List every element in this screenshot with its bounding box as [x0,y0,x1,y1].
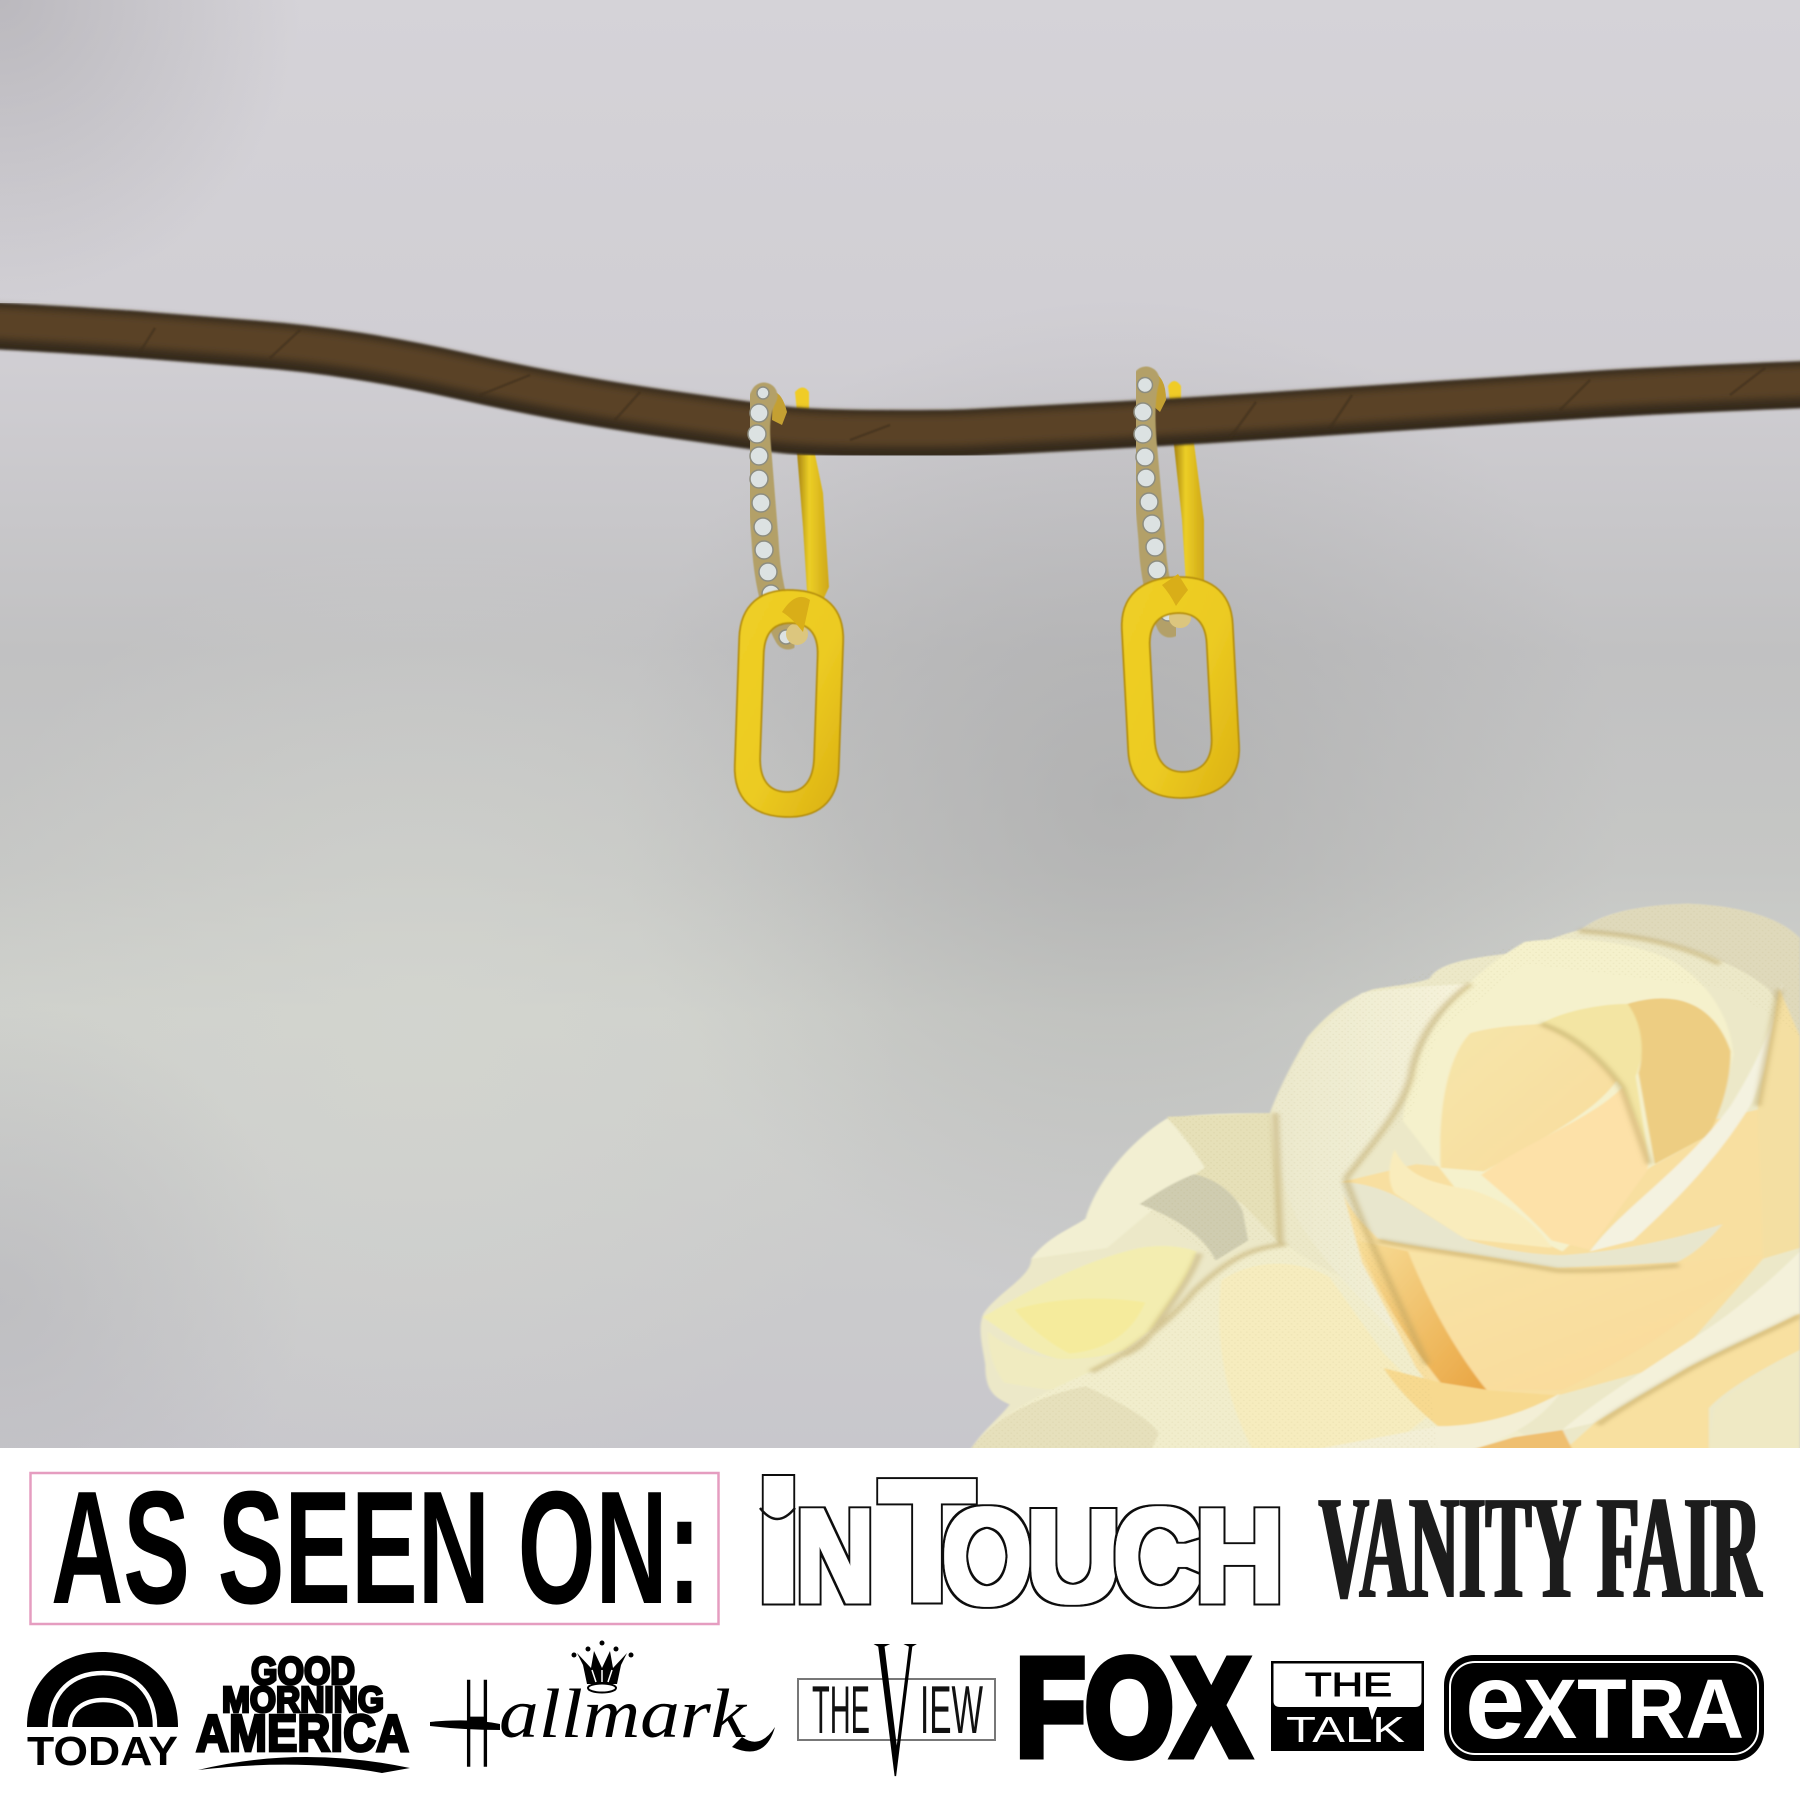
left oval link [733,588,845,819]
logo: The Talk: THE [1305,1666,1392,1703]
frayed right rim [1590,982,1782,1251]
brown cord [0,322,1800,440]
warm under area [1340,1106,1774,1426]
logo: Good Morning America: GOOD [251,1650,355,1693]
petal shadow lines [1091,931,1800,1425]
front petal body [1408,1251,1763,1390]
logo: Good Morning America: MORNING [222,1679,384,1720]
logo: InTouch: N [796,1482,874,1629]
logo: The View: THE [812,1672,870,1748]
right pave bar [1134,374,1191,628]
lower center petal [1384,1368,1557,1426]
right earring [1119,374,1242,801]
logo: The Talk [1271,1661,1424,1751]
logo: InTouch: H [1195,1482,1284,1629]
logo: Hallmark [430,1640,775,1794]
logo: The View: IEW [920,1672,983,1748]
logo: Extra: XTRA [1523,1662,1744,1756]
left rose back petals [1031,1119,1205,1259]
logo: Good Morning America [196,1650,410,1773]
right oval link [1119,574,1242,801]
main outer petal [1274,984,1470,1364]
logo: The View [797,1644,996,1776]
lower left petal [969,1244,1557,1452]
logo: Hallmark: allmark [499,1676,748,1753]
rose silhouette [969,904,1800,1452]
back petal [1579,904,1800,1037]
bud inner left petal [1440,1024,1617,1171]
left earring [733,387,845,819]
logo: InTouch [755,1440,1284,1639]
left pave bar [748,387,808,645]
as seen on box [30,1458,718,1638]
white logo band [0,1448,1800,1800]
logo: InTouch: T [879,1445,975,1637]
logo: InTouch: I [755,1440,802,1639]
fabric weave texture [969,904,1800,1452]
logo: The Talk: TALK [1286,1709,1405,1750]
orange crevice [1357,1241,1487,1390]
yellow rose [969,904,1800,1452]
hallmark crown [572,1640,634,1692]
logo: Today: TODAY [27,1728,178,1774]
center fold [1389,1150,1552,1248]
left rose inner [983,1246,1197,1359]
center bud petal [1481,1088,1648,1250]
logo: Hallmark: H [464,1653,490,1794]
logo: InTouch: U [1026,1483,1121,1629]
logo: Extra: e [1465,1640,1525,1761]
as seen on box: AS SEEN ON: [51,1458,701,1638]
logo: FOX: FOX [1016,1631,1249,1785]
logo: InTouch: C [1113,1481,1201,1632]
logo: Today [27,1652,178,1774]
lower right rim [1563,1251,1800,1430]
logo: Good Morning America: AMERICA [196,1705,409,1763]
logo: InTouch: O [942,1481,1032,1632]
bud shadow right [1628,998,1731,1164]
upper bud rim [1403,939,1733,1251]
frayed front rim [1340,1182,1722,1268]
logo: Extra [1444,1640,1764,1761]
earring back straps behind cord [795,381,1204,600]
